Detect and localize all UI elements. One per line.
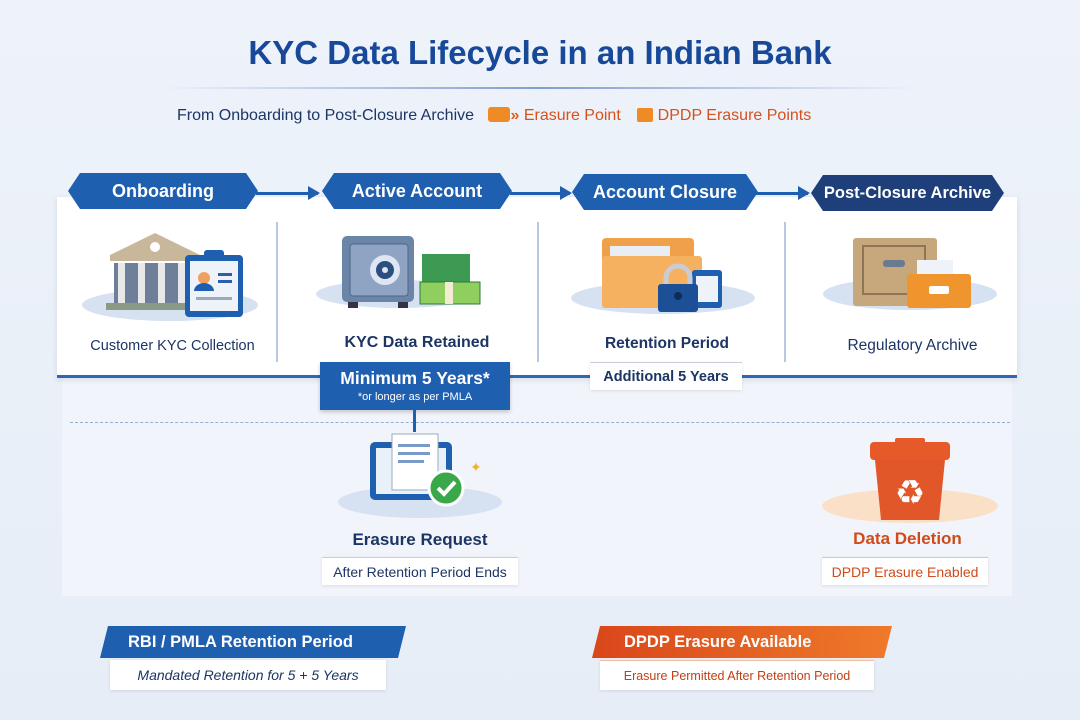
tab: active account: Active Account bbox=[352, 180, 482, 200]
legend box: dpdp: DPDP Erasure Available bbox=[624, 632, 811, 650]
text: regulatory archive: Regulatory Archive bbox=[847, 337, 978, 354]
icon: erasure request document: ✦ bbox=[470, 459, 482, 475]
text: retention period: Retention Period bbox=[605, 335, 729, 352]
legend box: rbi pmla: RBI / PMLA Retention Period bbox=[128, 632, 353, 650]
callout: minimum 5 years: Minimum 5 Years* bbox=[340, 368, 490, 388]
icon: recycle bin bbox=[822, 438, 998, 523]
tab: onboarding bbox=[68, 173, 258, 209]
icon: archive bbox=[823, 238, 997, 310]
icon: locked folder bbox=[571, 238, 755, 314]
callout: additional 5 years bbox=[590, 362, 742, 390]
text: data deletion: Data Deletion bbox=[853, 529, 962, 548]
arrows bbox=[256, 192, 318, 195]
icon: bank with id card bbox=[82, 233, 258, 321]
tab: post closure: Post-Closure Archive bbox=[824, 184, 991, 202]
legend box: rbi pmla: Mandated Retention for 5 + 5 Years bbox=[137, 667, 359, 683]
legend box: rbi pmla bbox=[100, 626, 406, 692]
callout: dpdp erasure enabled: DPDP Erasure Enabled bbox=[832, 564, 978, 580]
lower panel bbox=[62, 378, 1012, 596]
tab: onboarding: Onboarding bbox=[112, 180, 214, 200]
callout: after retention: After Retention Period Ends bbox=[333, 564, 507, 580]
text: kyc data retained: KYC Data Retained bbox=[345, 334, 489, 351]
tab: active account bbox=[322, 173, 512, 209]
callout: minimum 5 years bbox=[320, 362, 510, 410]
callout: after retention bbox=[322, 557, 518, 585]
callout: dpdp erasure enabled bbox=[822, 557, 988, 585]
text: erasure request: Erasure Request bbox=[352, 530, 488, 549]
icon: safe and money bbox=[316, 236, 480, 308]
tab: post closure bbox=[811, 175, 1004, 211]
icon: erasure request document bbox=[338, 434, 502, 518]
text: customer kyc: Customer KYC Collection bbox=[90, 338, 255, 354]
legend box: dpdp bbox=[592, 626, 892, 692]
top stage panel bbox=[57, 197, 1017, 378]
callout: minimum 5 years: *or longer as per PMLA bbox=[358, 391, 472, 403]
legend box: dpdp: Erasure Permitted After Retention Period bbox=[624, 668, 850, 682]
subtitle with legend: From Onboarding to Post-Closure Archive » Erasure Point DPDP Erasure Points bbox=[177, 107, 811, 124]
callout: additional 5 years: Additional 5 Years bbox=[603, 368, 729, 384]
icon: recycle bin: ♻ bbox=[895, 474, 925, 512]
tab: account closure bbox=[572, 174, 758, 210]
title: KYC Data Lifecycle in an Indian Bank bbox=[248, 34, 832, 71]
tab: account closure: Account Closure bbox=[593, 182, 737, 202]
